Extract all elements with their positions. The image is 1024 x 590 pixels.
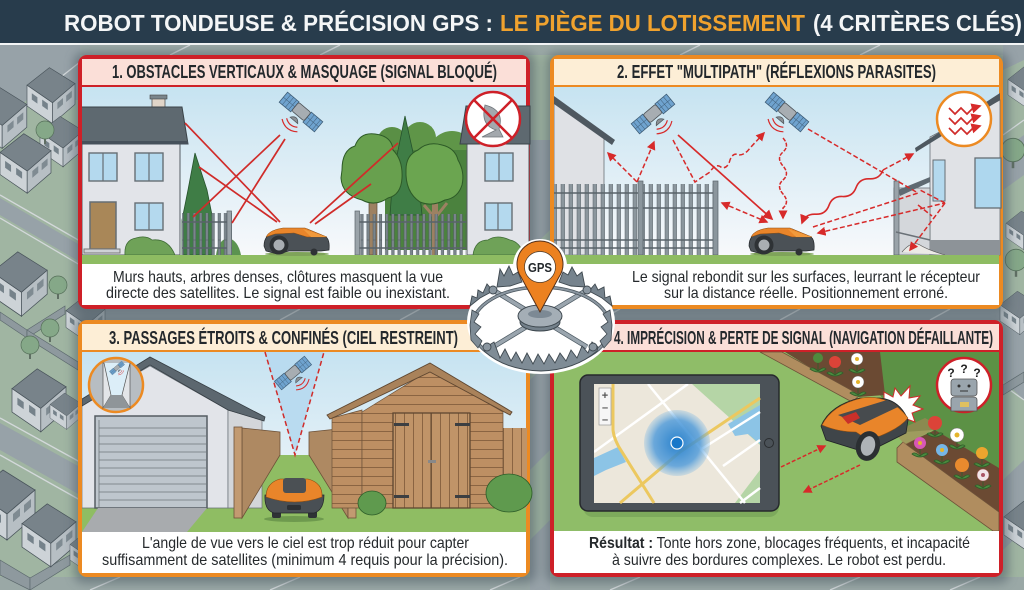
icon: corridor inset bbox=[89, 358, 143, 412]
description text: sur la distance réelle. Positionnement erroné. bbox=[664, 285, 948, 302]
panel 3: narrow passages bbox=[78, 320, 532, 577]
description text bbox=[106, 269, 450, 302]
bottom teeth bbox=[484, 342, 598, 371]
top-right teeth bbox=[559, 267, 612, 306]
panel 2: multipath bbox=[550, 55, 1003, 309]
icon: zigzag signal bbox=[937, 92, 991, 146]
description text: directe des satellites. Le signal est faible ou inexistant. bbox=[106, 285, 450, 302]
title banner: LE PIÈGE DU LOTISSEMENT bbox=[500, 9, 805, 36]
left fir tree bbox=[182, 153, 213, 255]
narrow sky cone dashes bbox=[265, 352, 324, 455]
text area bbox=[554, 531, 999, 573]
sky scene bbox=[554, 87, 999, 257]
robot mower bbox=[264, 228, 329, 256]
sky scene bbox=[82, 87, 526, 257]
view cone bbox=[265, 352, 324, 455]
icon: no satellite bbox=[466, 92, 520, 146]
side teeth bbox=[470, 310, 612, 348]
description text bbox=[632, 269, 981, 302]
right fence bbox=[355, 211, 466, 255]
left fence bbox=[182, 211, 232, 255]
grass bbox=[82, 255, 526, 264]
robot mower front view bbox=[264, 478, 324, 522]
fence bbox=[554, 181, 718, 255]
robot mower bbox=[821, 397, 908, 464]
reflected signal arrows bbox=[608, 129, 945, 250]
blocked signal rays bbox=[185, 123, 398, 224]
left house bbox=[78, 95, 188, 255]
description text: L'angle de vue vers le ciel est trop réduit pour capter bbox=[142, 535, 470, 552]
icon: confused robot: ? bbox=[947, 366, 955, 380]
title banner: ROBOT TONDEUSE & PRÉCISION GPS : bbox=[64, 9, 493, 36]
grass bbox=[82, 508, 526, 532]
trap ring bbox=[472, 287, 610, 367]
collision burst bbox=[884, 386, 923, 422]
driveway bbox=[82, 508, 207, 532]
central GPS bear trap bbox=[467, 239, 615, 374]
icon: satellite bbox=[274, 356, 320, 399]
icon: satellite right bbox=[756, 92, 809, 143]
title banner bbox=[0, 0, 1024, 45]
tablet with map bbox=[580, 375, 779, 517]
map zoom controls: + bbox=[602, 390, 608, 402]
panel 4: inaccuracy and signal loss bbox=[550, 320, 1003, 577]
panel 1: vertical obstacles bbox=[78, 55, 530, 309]
grass bbox=[554, 255, 999, 264]
icon: confused robot: ? bbox=[973, 366, 981, 380]
description text bbox=[102, 535, 508, 569]
trap pivots bbox=[483, 286, 597, 351]
passage fences bbox=[234, 427, 356, 518]
icon: confused robot: ? bbox=[960, 362, 968, 376]
icon: confused robot bbox=[937, 358, 991, 412]
GPS pin: GPS bbox=[528, 260, 552, 275]
map zoom controls bbox=[599, 388, 611, 426]
icon: satellite left bbox=[631, 94, 684, 145]
central plate bbox=[518, 305, 562, 331]
map zoom controls: – bbox=[602, 414, 608, 426]
left house bbox=[554, 96, 615, 255]
trap arms bbox=[493, 290, 587, 347]
flowers bbox=[810, 353, 991, 489]
lawn bbox=[554, 352, 999, 532]
map zoom controls: – bbox=[602, 402, 608, 414]
robot mower bbox=[749, 228, 814, 256]
trees right bbox=[341, 116, 476, 255]
description text: Murs hauts, arbres denses, clôtures masquent la vue bbox=[113, 269, 443, 286]
flower beds bbox=[760, 352, 999, 531]
GPS pin bbox=[517, 241, 563, 312]
GPS uncertainty zone bbox=[644, 410, 710, 476]
result text: à suivre des bordures complexes. Le robot est perdu. bbox=[612, 552, 946, 569]
right house bbox=[460, 106, 530, 255]
white halo bbox=[467, 239, 615, 374]
wooden shed bbox=[327, 363, 527, 508]
icon: satellite bbox=[270, 92, 323, 143]
result text bbox=[589, 535, 970, 569]
bushes bbox=[358, 474, 532, 515]
offset arrows bbox=[781, 446, 860, 492]
hedge bbox=[870, 352, 999, 470]
right house bbox=[894, 93, 1001, 255]
garage bbox=[82, 357, 265, 508]
sky scene bbox=[82, 352, 526, 532]
top-left teeth bbox=[470, 266, 522, 306]
